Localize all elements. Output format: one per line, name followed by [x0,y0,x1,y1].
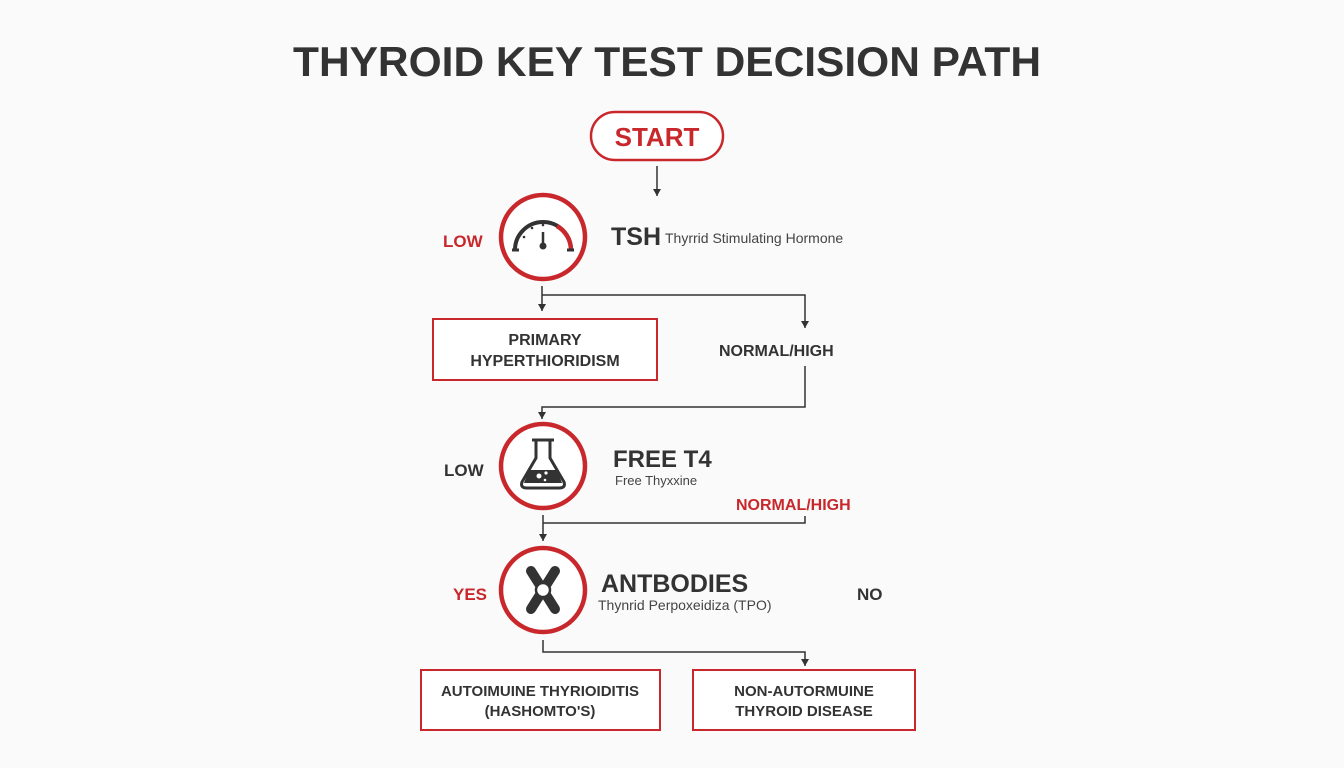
heading: TSH [611,223,843,251]
box: non-autoimmune: NON-AUTORMUINE [734,683,874,700]
heading: FREE T4: FREE T4 [613,446,712,473]
box: primary hyperthyroidism [433,319,657,380]
label: normal/high red: NORMAL/HIGH [736,497,851,514]
arrow: start to TSH [656,166,658,196]
heading: FREE T4: Free Thyxxine [615,473,697,488]
FREE T4 node [444,424,712,508]
arrow: to free T4 [542,366,805,419]
heading: antibodies: Thynrid Perpoxeidiza (TPO) [598,597,772,613]
box: non-autoimmune [693,670,915,730]
start pill: START [615,122,699,152]
label: LOW: LOW [444,461,485,480]
icon: antibody [501,548,585,632]
arrows: TSH branches [542,286,805,328]
start pill [591,112,723,160]
box: primary hyperthyroidism: PRIMARY [508,332,582,349]
box: non-autoimmune: THYROID DISEASE [735,703,873,720]
icon: gauge [501,195,585,279]
label: LOW: LOW [443,232,484,251]
box: autoimmune thyroiditis [421,670,660,730]
heading: antibodies [598,570,772,613]
ANTIBODIES node [453,548,882,632]
title: THYROID KEY TEST DECISION PATH [293,38,1041,85]
heading: TSH: Thyrrid Stimulating Hormone [665,230,843,246]
heading: antibodies: ANTBODIES [601,570,748,598]
label: NO: NO [857,585,882,604]
arrows: to antibodies [543,515,805,541]
arrow: to non-autoimmune [543,640,805,666]
label: YES: YES [453,585,487,604]
box: autoimmune thyroiditis: AUTOIMUINE THYRIOIDITIS [441,683,639,700]
heading: TSH: TSH [611,223,661,251]
box: primary hyperthyroidism: HYPERTHIORIDISM [470,353,620,370]
label: normal/high: NORMAL/HIGH [719,343,834,360]
icon: flask [501,424,585,508]
heading: FREE T4 [613,446,712,488]
box: autoimmune thyroiditis: (HASHOMTO'S) [485,703,595,720]
TSH node [443,195,843,279]
